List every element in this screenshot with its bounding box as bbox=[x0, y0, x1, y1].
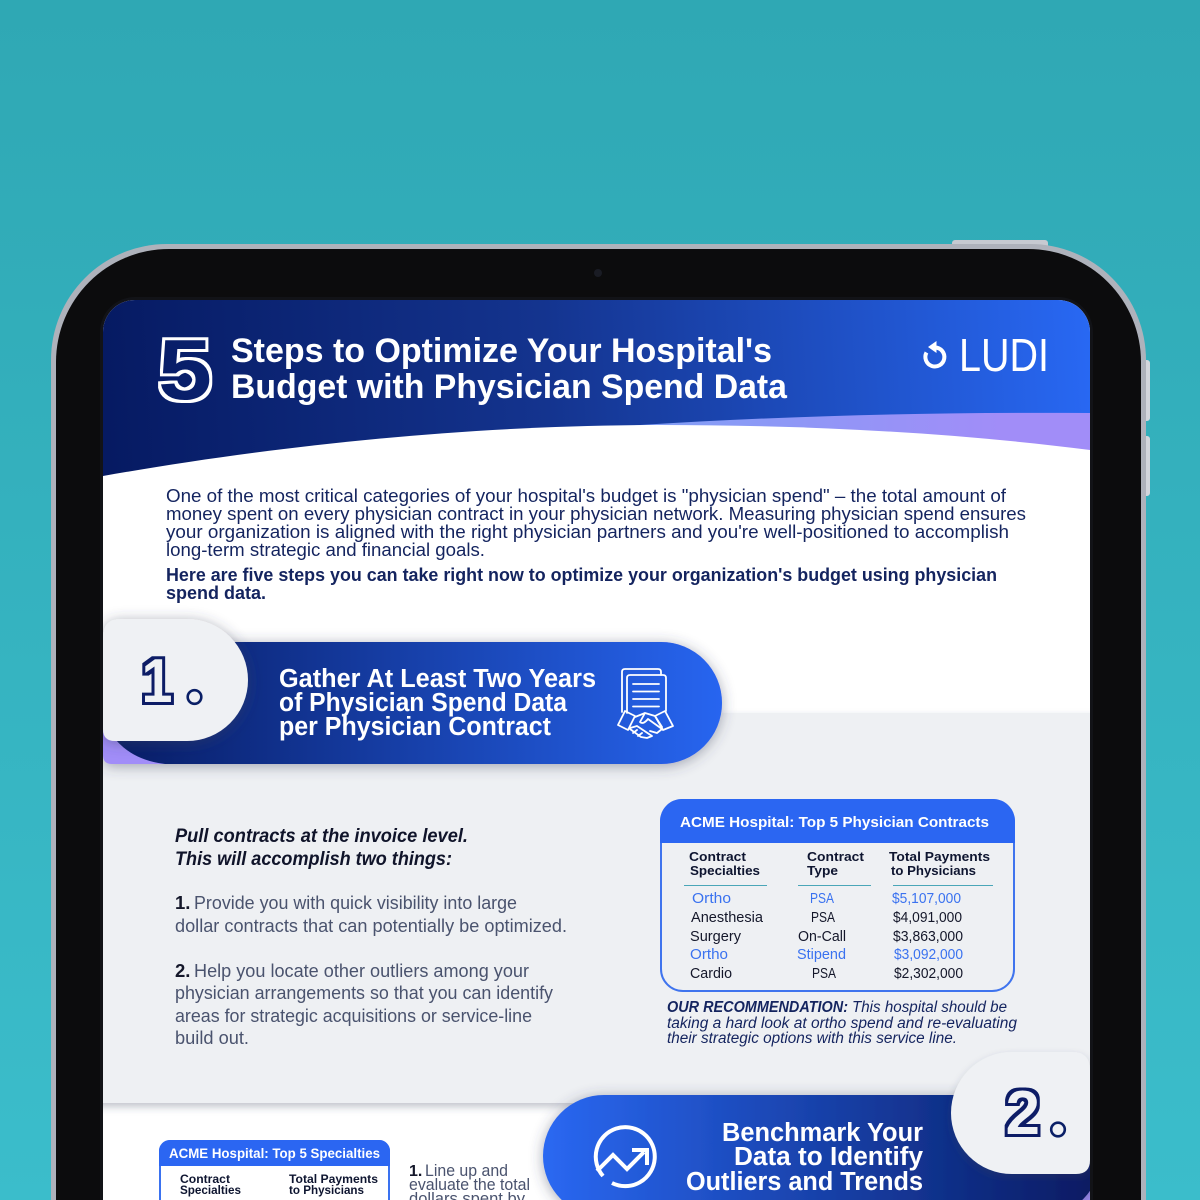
step 2 table (partial): to Physicians bbox=[289, 1183, 364, 1197]
panel: step 1 body bbox=[90, 713, 1100, 1103]
title: Budget with Physician Spend Data bbox=[231, 368, 788, 406]
table: top 5 physician contracts: On-Call bbox=[798, 929, 846, 945]
point 2: areas for strategic acquisitions or service-line bbox=[175, 1005, 532, 1026]
point 1: Provide you with quick visibility into large bbox=[194, 892, 517, 913]
table: top 5 physician contracts: Specialties bbox=[690, 863, 760, 878]
title bbox=[231, 332, 788, 406]
intro paragraph: your organization is aligned with the right physician partners and you're well-positioned to accomplish bbox=[166, 521, 1009, 542]
table: top 5 physician contracts bbox=[660, 799, 1015, 991]
intro bold lead-in bbox=[166, 564, 997, 603]
table: top 5 physician contracts: Stipend bbox=[797, 947, 846, 963]
recommendation note: their strategic options with this service line. bbox=[667, 1030, 957, 1047]
point 1: dollar contracts that can potentially be optimized. bbox=[175, 915, 567, 936]
intro paragraph: money spent on every physician contract in your physician network. Measuring physician spend ensures bbox=[166, 503, 1026, 524]
step 1 heading: of Physician Spend Data bbox=[279, 689, 568, 717]
table: top 5 physician contracts: Type bbox=[807, 863, 838, 878]
step 2 number badge bbox=[951, 1052, 1090, 1174]
step 2 number badge: 2 bbox=[1006, 1079, 1040, 1148]
step 1 banner bbox=[90, 619, 722, 764]
step 2 table (partial): Specialties bbox=[180, 1183, 241, 1197]
intro paragraph bbox=[166, 485, 1026, 560]
intro bold lead-in: spend data. bbox=[166, 582, 266, 603]
intro paragraph: One of the most critical categories of your hospital's budget is "physician spend" – the total amount of bbox=[166, 485, 1007, 506]
intro bold lead-in: Here are five steps you can take right now to optimize your organization's budget using physician bbox=[166, 564, 997, 585]
recommendation note: OUR RECOMMENDATION: bbox=[667, 999, 848, 1016]
step 2 heading: Outliers and Trends bbox=[686, 1168, 923, 1196]
table: top 5 physician contracts: PSA bbox=[812, 966, 836, 982]
step 1 lead-in: This will accomplish two things: bbox=[175, 849, 452, 870]
title: Steps to Optimize Your Hospital's bbox=[231, 332, 772, 370]
table: top 5 physician contracts: ACME Hospital: Top 5 Physician Contracts bbox=[680, 814, 989, 831]
table: top 5 physician contracts: $3,092,000 bbox=[894, 947, 963, 963]
LUDI logo bbox=[923, 339, 1046, 372]
table: top 5 physician contracts: Surgery bbox=[690, 929, 742, 945]
intro paragraph: long-term strategic and financial goals. bbox=[166, 539, 485, 560]
step 1 number badge bbox=[103, 619, 248, 741]
step 1 lead-in bbox=[175, 826, 468, 870]
recommendation note: taking a hard look at ortho spend and re-evaluating bbox=[667, 1015, 1017, 1032]
point 2 bbox=[175, 960, 554, 1048]
step 1 lead-in: Pull contracts at the invoice level. bbox=[175, 826, 468, 847]
step 1 heading bbox=[279, 665, 596, 741]
step 2 heading bbox=[687, 1122, 923, 1190]
screen bbox=[90, 300, 1101, 1200]
icon: contract and handshake bbox=[618, 669, 673, 738]
table: top 5 physician contracts: $4,091,000 bbox=[893, 910, 962, 926]
recommendation note: This hospital should be bbox=[852, 999, 1007, 1016]
point 2: Help you locate other outliers among your bbox=[194, 960, 529, 981]
step 2 text (partial): Line up and bbox=[425, 1162, 508, 1180]
step 1 number badge: 1 bbox=[142, 647, 172, 716]
point 1: 1. bbox=[175, 892, 190, 913]
table: top 5 physician contracts: PSA bbox=[811, 910, 835, 926]
step 2 heading: Benchmark Your bbox=[722, 1119, 923, 1147]
table: top 5 physician contracts: $2,302,000 bbox=[894, 966, 963, 982]
step 2 table (partial): Total Payments bbox=[289, 1172, 378, 1186]
point 2: 2. bbox=[175, 960, 190, 981]
table: top 5 physician contracts: Anesthesia bbox=[691, 910, 764, 926]
big outlined number 5: 5 bbox=[158, 323, 212, 418]
header band bbox=[103, 300, 1090, 476]
table: top 5 physician contracts: Ortho bbox=[692, 891, 731, 907]
step 2 heading: Data to Identify bbox=[734, 1143, 924, 1171]
table: top 5 physician contracts: PSA bbox=[810, 891, 834, 907]
table: top 5 physician contracts: $5,107,000 bbox=[892, 891, 961, 907]
recommendation note bbox=[667, 999, 1017, 1047]
LUDI logo: LUDI bbox=[959, 329, 1049, 381]
point 2: physician arrangements so that you can identify bbox=[175, 982, 554, 1003]
step 2 text (partial): evaluate the total bbox=[409, 1176, 530, 1194]
table: top 5 physician contracts: Cardio bbox=[690, 966, 732, 982]
icon: growth chart in circle bbox=[596, 1127, 655, 1186]
step 1 heading: Gather At Least Two Years bbox=[279, 665, 596, 693]
table: top 5 physician contracts: Ortho bbox=[690, 947, 728, 963]
step 1 heading: per Physician Contract bbox=[279, 713, 551, 741]
step 2 banner bbox=[543, 1052, 1101, 1200]
table: top 5 physician contracts: Contract bbox=[807, 849, 865, 864]
table: top 5 physician contracts: Contract bbox=[689, 849, 747, 864]
step 2 table (partial): Contract bbox=[180, 1172, 230, 1186]
step 2 table (partial) bbox=[159, 1140, 390, 1200]
point 2: build out. bbox=[175, 1027, 249, 1048]
step 2 table (partial): ACME Hospital: Top 5 Specialties bbox=[169, 1146, 380, 1161]
point 1 bbox=[175, 892, 567, 936]
table: top 5 physician contracts: Total Payments bbox=[889, 849, 990, 864]
table: top 5 physician contracts: to Physicians bbox=[891, 863, 976, 878]
table: top 5 physician contracts: $3,863,000 bbox=[893, 929, 963, 945]
step 2 text (partial) bbox=[409, 1162, 530, 1200]
tablet device frame bbox=[51, 240, 1150, 1200]
step 2 text (partial): 1. bbox=[409, 1163, 422, 1180]
